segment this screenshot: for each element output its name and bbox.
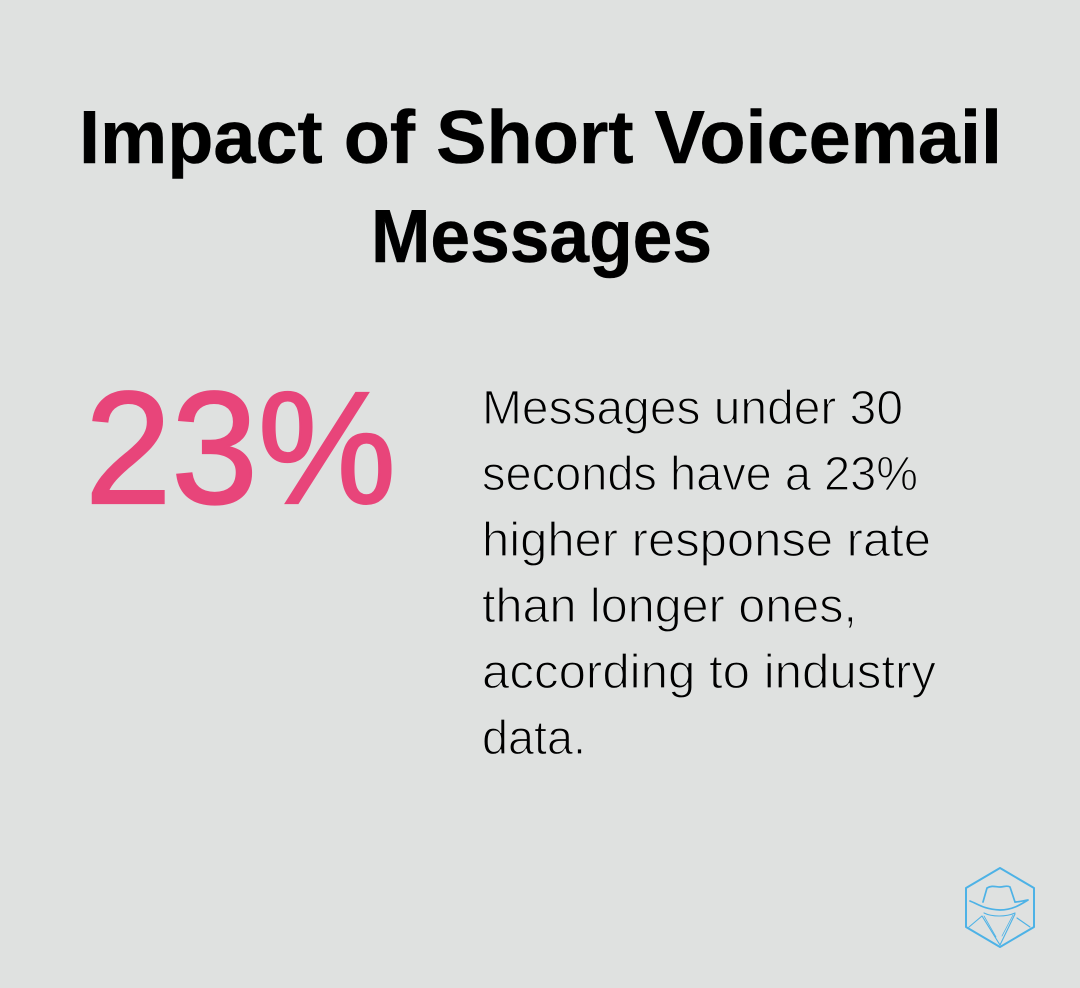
description text: higher response rate [482,514,931,567]
title: Messages [371,194,712,278]
description text: than longer ones, [482,580,857,633]
description text [482,382,936,765]
icon: hexagon logo with spy hat [966,868,1034,947]
title: Impact of Short Voicemail [79,95,1002,179]
description text: data. [482,712,586,765]
big statistic: 23%: 23% [85,358,396,537]
description text: according to industry [482,646,936,699]
description text: seconds have a 23% [482,448,918,501]
description text: Messages under 30 [482,382,903,435]
title [79,95,1002,278]
